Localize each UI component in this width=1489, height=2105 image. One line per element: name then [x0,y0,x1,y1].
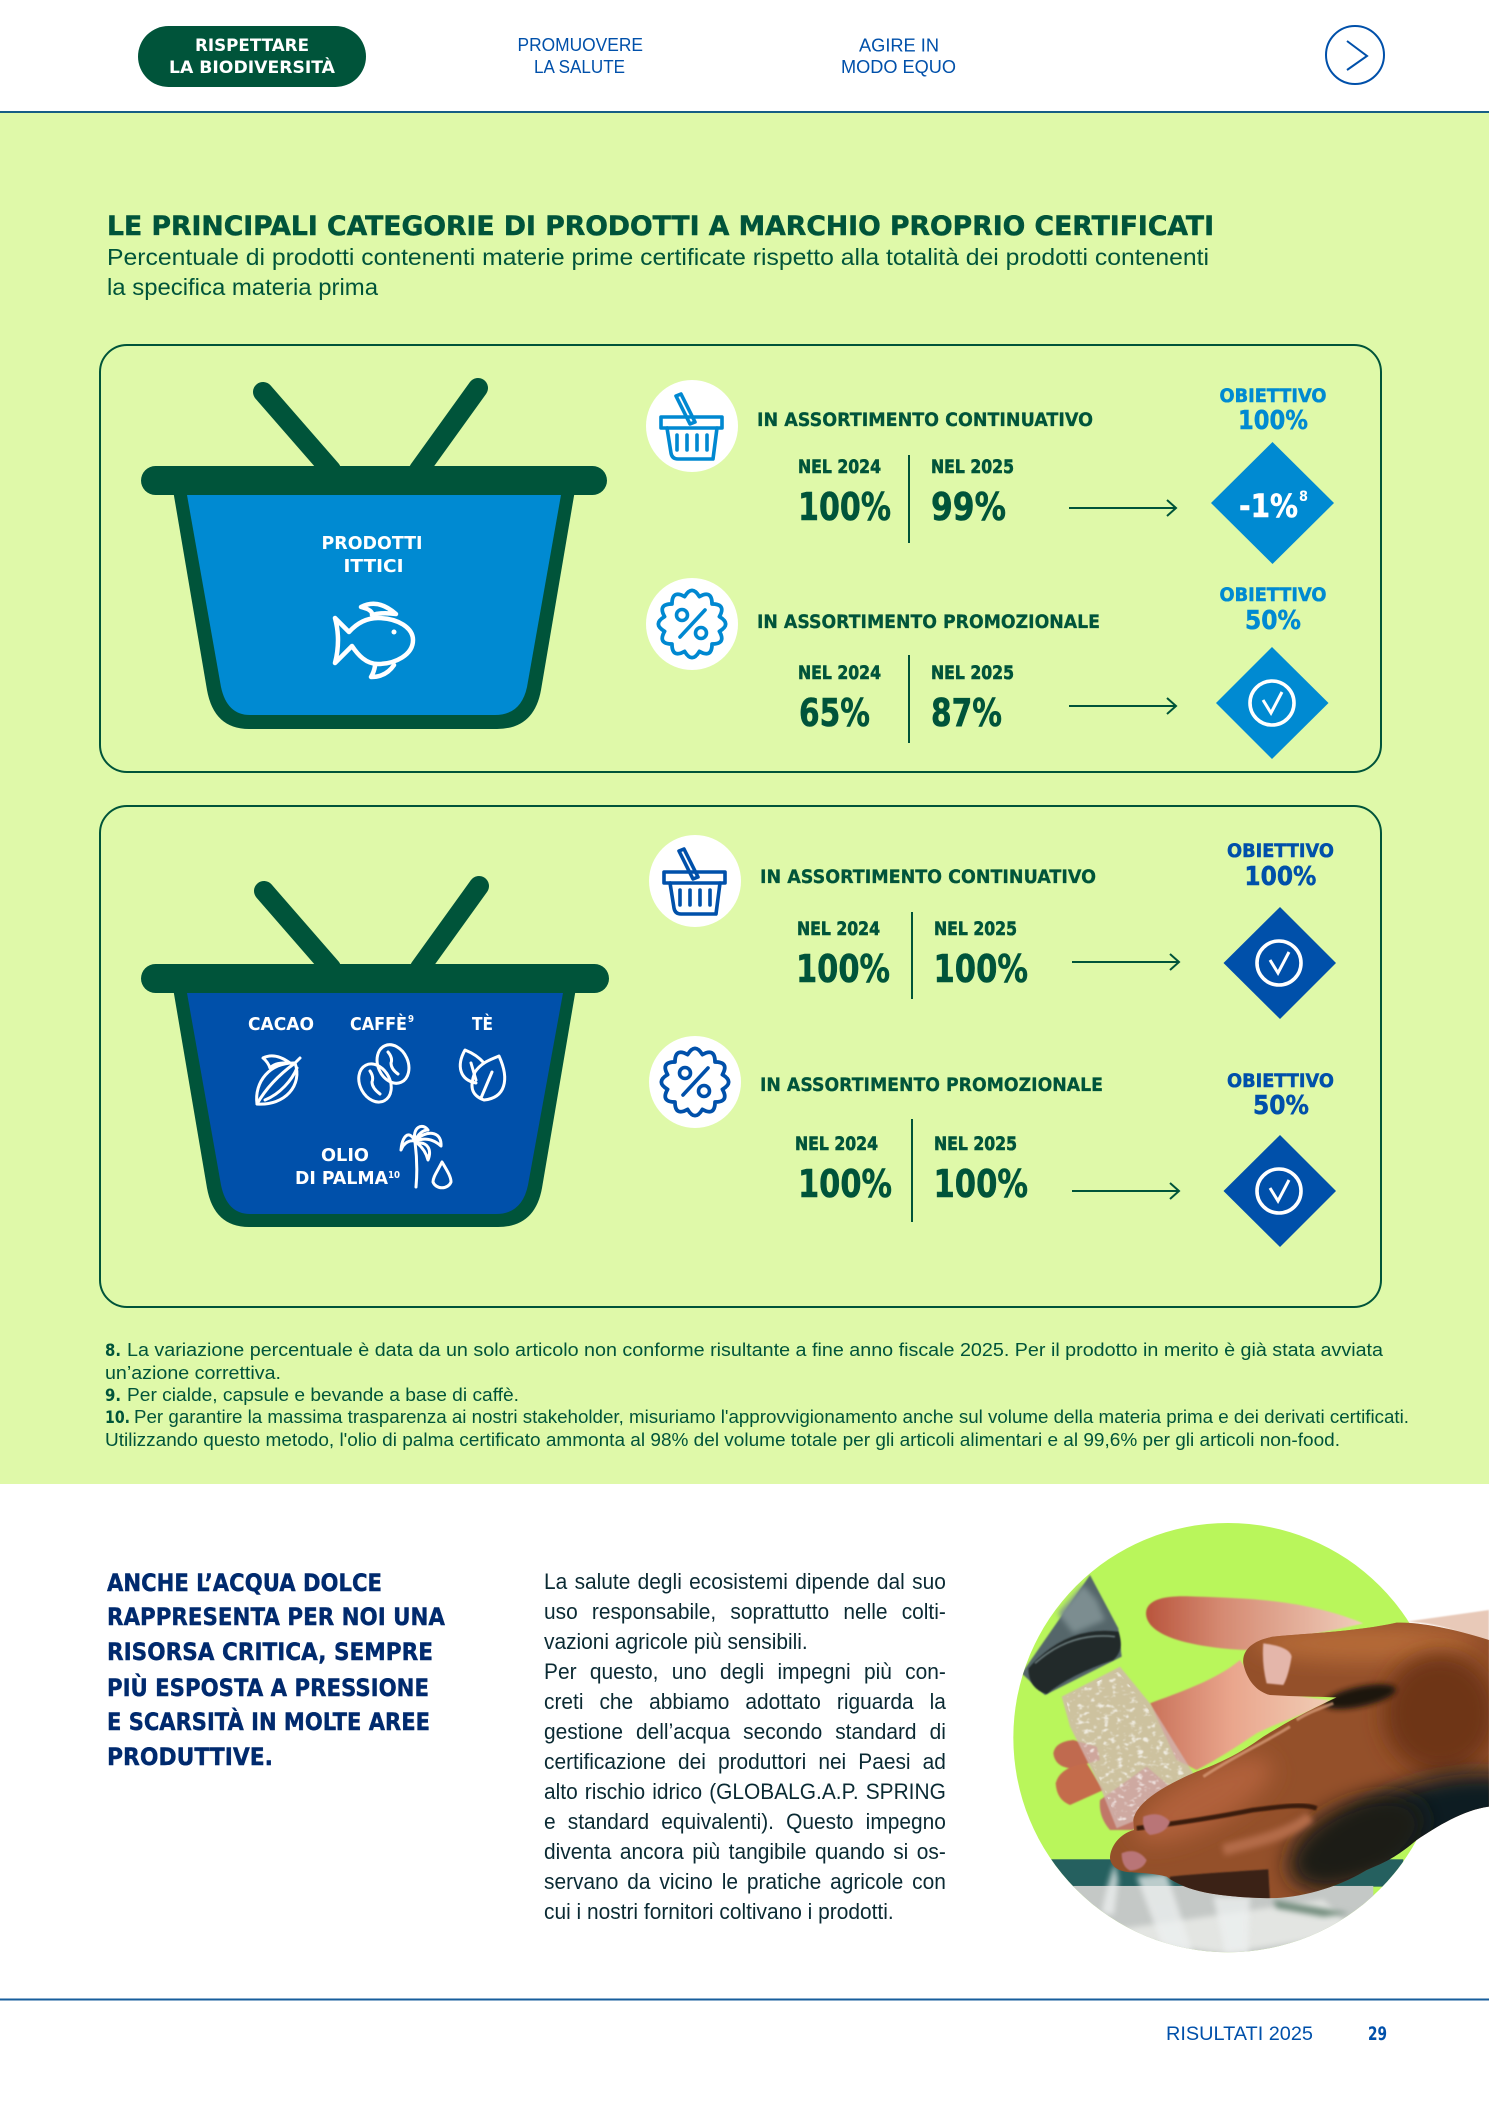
values: 65% [799,691,870,735]
footer [0,1998,1489,2045]
values: NEL 2025 [931,663,1014,684]
title: LE PRINCIPALI CATEGORIE DI PRODOTTI A MARCHIO PROPRIO CERTIFICATI [107,211,1214,242]
active tab: rispettare la biodiversità [138,26,366,87]
icon: basket badge [646,380,738,472]
row label: IN ASSORTIMENTO CONTINUATIVO [760,866,1096,888]
tab: agire in modo equo [841,36,956,77]
footnotes [105,1340,1409,1450]
arrow [1069,500,1176,516]
water stream [1062,1667,1193,1828]
target: OBIETTIVO [1220,585,1326,606]
body paragraph: La salute degli ecosistemi dipende dal suo [544,1569,946,1594]
values [795,1119,1028,1222]
basket label [322,533,422,577]
values: 99% [931,485,1006,529]
values: NEL 2025 [934,919,1017,940]
body paragraph: alto rischio idrico (GLOBALG.A.P. SPRING [544,1779,946,1804]
icon: caffè [352,1040,415,1108]
values: 100% [798,485,891,529]
callout heading: RAPPRESENTA PER NOI UNA [107,1603,445,1631]
body paragraph: servano da vicino le pratiche agricole con [544,1869,946,1894]
subtitle [107,244,1209,300]
footnotes: Per garantire la massima trasparenza ai nostri stakeholder, misuriamo l'approvvigionamento anche sul volume della materia prima e dei derivati certificati. [134,1407,1409,1427]
icon: tè [460,1050,505,1100]
tab: agire in modo equo: AGIRE IN [859,36,939,56]
values: 100% [934,947,1028,991]
body paragraph: cui i nostri fornitori coltivano i prodotti. [544,1899,894,1924]
footnotes: un’azione correttiva. [105,1363,281,1383]
values [796,912,1028,999]
footnotes: Per cialde, capsule e bevande a base di caffè. [127,1385,519,1405]
basket labels: OLIO [321,1145,369,1166]
basket label: PRODOTTI [322,533,422,554]
basket labels: 10 [388,1170,400,1181]
basket labels [248,1013,493,1189]
diamond: -1% [1211,442,1334,564]
callout heading: E SCARSITÀ IN MOLTE AREE [107,1707,430,1736]
row label: IN ASSORTIMENTO PROMOZIONALE [760,1074,1103,1096]
panel: cacao caffè tè olio di palma [100,806,1381,1307]
subtitle: Percentuale di prodotti contenenti materie prime certificate rispetto alla totalità dei prodotti contenenti [107,244,1209,270]
callout heading: PIÙ ESPOSTA A PRESSIONE [107,1672,429,1702]
values: 100% [796,947,890,991]
photo: hands under running water [990,1523,1489,1956]
body paragraph [544,1569,946,1924]
basket labels: DI PALMA [295,1168,388,1189]
page number: 29 [1368,2024,1387,2045]
icon: palma e goccia [401,1126,451,1188]
diamond: check [1224,1135,1336,1247]
target: OBIETTIVO [1220,386,1326,407]
values: 87% [931,691,1002,735]
icon: cacao [257,1056,300,1104]
target [1220,585,1326,636]
target [1220,386,1326,436]
basket labels: TÈ [472,1013,493,1035]
diamond: -1%: -1% [1239,487,1298,525]
basket labels: 9 [408,1014,414,1025]
footer label: RISULTATI 2025 [1166,2024,1313,2045]
target: 100% [1244,862,1316,892]
body paragraph: e standard equivalenti). Questo impegno [544,1809,946,1834]
row: assortimento promozionale [649,1036,1336,1247]
back hand [1053,1596,1489,1830]
basket: prodotti ittici [141,388,607,729]
body paragraph: uso responsabile, soprattutto nelle colti- [544,1599,946,1624]
active tab: rispettare la biodiversità: RISPETTARE [195,36,309,55]
front hand [1103,1613,1489,1911]
icon: basket badge [649,835,741,927]
target: 50% [1245,606,1301,636]
footnotes: La variazione percentuale è data da un solo articolo non conforme risultante a fine anno fiscale 2025. Per il prodotto in merito è già stata avviata [127,1340,1384,1360]
values [798,655,1014,743]
diamond: check [1216,647,1328,759]
values: NEL 2024 [797,919,880,940]
target: OBIETTIVO [1227,1071,1334,1092]
green background panel [0,112,1489,1484]
target [1227,1071,1334,1121]
body paragraph: Per questo, uno degli impegni più con- [544,1659,946,1684]
basket labels: CACAO [248,1014,314,1035]
callout heading: ANCHE L’ACQUA DOLCE [107,1569,382,1597]
footnotes: Utilizzando questo metodo, l'olio di palma certificato ammonta al 98% del volume totale per gli articoli alimentari e al 99,6% per gli articoli non-food. [105,1430,1340,1450]
icon: discount badge [649,1036,741,1128]
row: assortimento continuativo [646,380,1334,564]
navigation bar [138,26,1384,87]
values: 100% [934,1162,1028,1206]
green circle [1013,1523,1443,1952]
panel: prodotti ittici [100,345,1381,772]
body paragraph: gestione dell’acqua secondo standard di [544,1719,946,1744]
basket labels: CAFFÈ [350,1013,407,1035]
body paragraph: diventa ancora più tangibile quando si os- [544,1839,946,1864]
target: OBIETTIVO [1227,841,1334,862]
diamond: -1%: 8 [1299,489,1308,505]
arrow [1069,698,1176,714]
row: assortimento continuativo [649,835,1336,1019]
tab: promuovere la salute: PROMUOVERE [518,35,643,55]
tab: agire in modo equo: MODO EQUO [841,57,956,77]
row label: IN ASSORTIMENTO PROMOZIONALE [757,611,1100,633]
values: NEL 2024 [798,457,881,478]
body paragraph: vazioni agricole più sensibili. [544,1629,808,1654]
icon: discount badge [646,578,738,670]
footnotes: 8. [105,1341,121,1361]
values: NEL 2024 [795,1134,878,1155]
tab: promuovere la salute [518,35,643,77]
target: 50% [1253,1091,1309,1121]
callout heading [107,1569,445,1771]
basket label: ITTICI [344,556,404,577]
sink and faucet inside circle [990,1575,1403,1956]
row label: IN ASSORTIMENTO CONTINUATIVO [757,409,1093,431]
body paragraph: creti che abbiamo adottato riguarda la [544,1689,946,1714]
target: 100% [1238,406,1308,436]
values: 100% [798,1162,892,1206]
values: NEL 2024 [798,663,881,684]
values [798,455,1014,543]
callout heading: PRODUTTIVE. [107,1743,273,1771]
icon: next arrow [1326,26,1384,84]
tab: promuovere la salute: LA SALUTE [534,57,625,77]
diamond: check [1224,907,1336,1019]
arrow [1072,954,1179,970]
callout heading: RISORSA CRITICA, SEMPRE [107,1638,433,1666]
active tab: rispettare la biodiversità: LA BIODIVERSITÀ [169,58,335,77]
row: assortimento promozionale [646,578,1328,759]
values: NEL 2025 [931,457,1014,478]
arrow [1072,1183,1179,1199]
subtitle: la specifica materia prima [107,274,379,300]
body paragraph: certificazione dei produttori nei Paesi ad [544,1749,946,1774]
values: NEL 2025 [934,1134,1017,1155]
footnotes: 10. [105,1408,130,1428]
target [1227,841,1334,892]
footnotes: 9. [105,1386,121,1406]
basket: materie prime [141,886,609,1227]
icon: fish [335,604,413,677]
